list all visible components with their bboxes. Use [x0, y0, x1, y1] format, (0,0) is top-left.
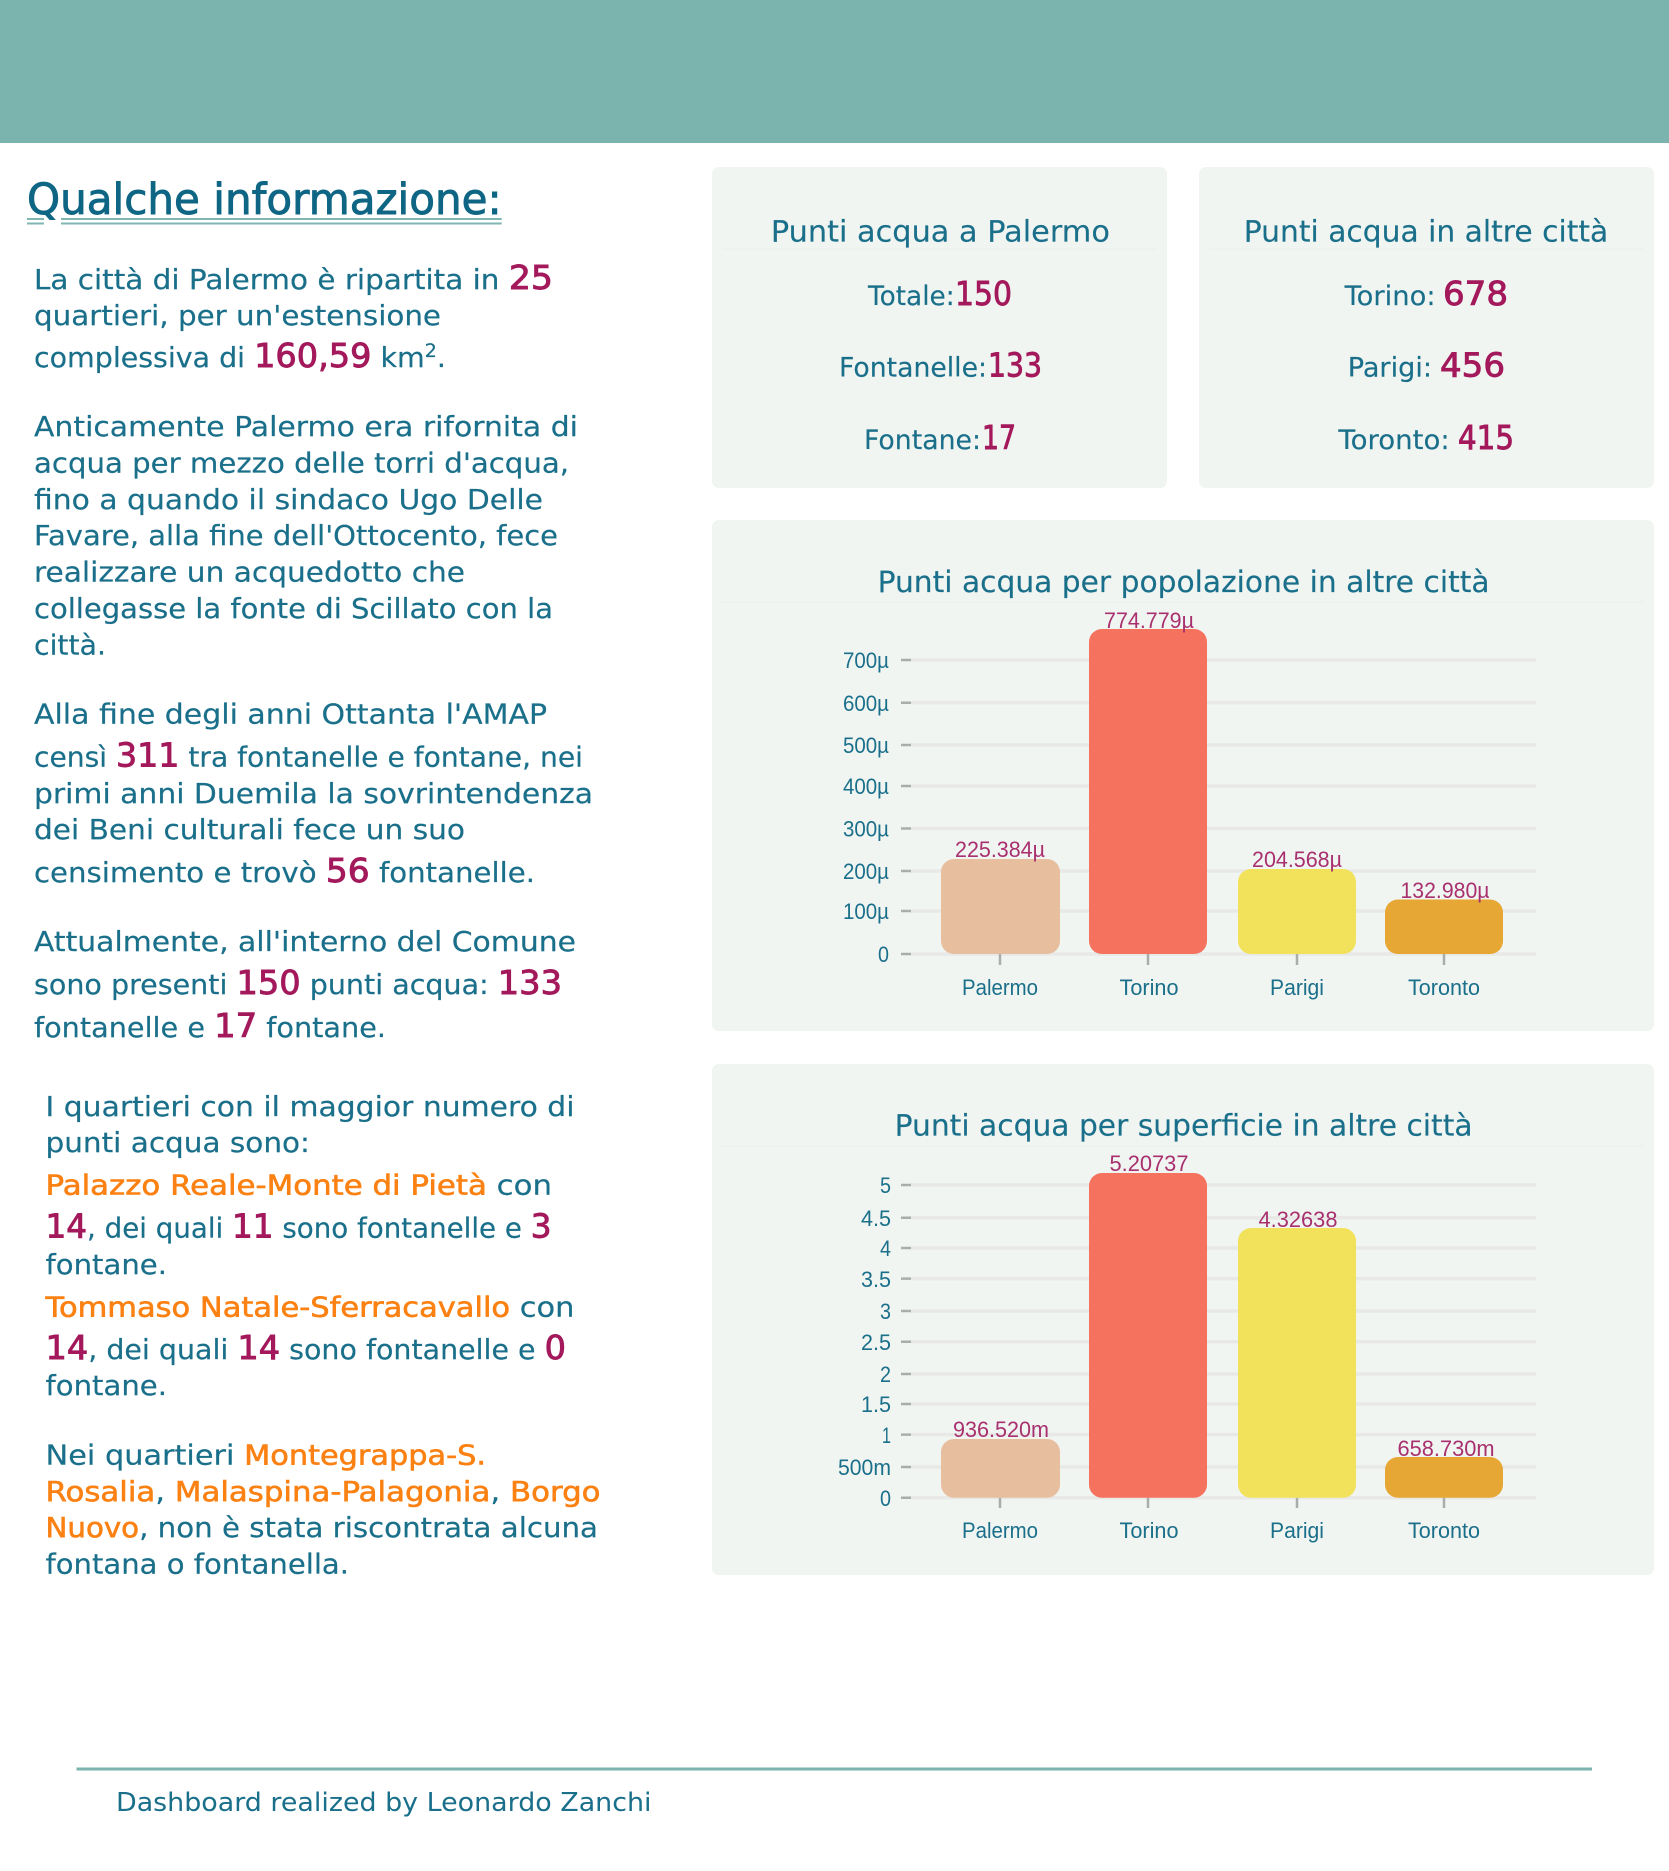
panel: Punti acqua in altre città: Torino: — [1344, 281, 1436, 312]
text block: quartieri con più punti acqua: 14, dei quali 11 sono fontanelle e 3 — [46, 1207, 552, 1246]
bar chart: superficie — [838, 1151, 1536, 1543]
bar chart: popolazione: 774.779µ — [1104, 608, 1194, 633]
bar chart: superficie: 658.730m — [1398, 1436, 1494, 1461]
text block: situazione attuale: Attualmente, all'interno del Comune — [34, 925, 576, 958]
bar chart: popolazione: 225.384µ — [955, 837, 1045, 862]
bar chart: superficie: 2 — [880, 1362, 891, 1387]
bar chart: popolazione: 600µ — [843, 691, 889, 716]
panel: Punti acqua a Palermo: Punti acqua a Palermo — [771, 215, 1110, 249]
bar chart: superficie: 5 — [880, 1173, 891, 1198]
text block: quartieri con più punti acqua: Palazzo Reale-Monte di Pietà con — [46, 1169, 552, 1202]
bar chart: popolazione: 204.568µ — [1252, 847, 1342, 872]
bar chart: superficie: 936.520m — [953, 1417, 1049, 1442]
text block: storia: acqua per mezzo delle torri d'acqua, — [34, 446, 569, 479]
chart title: popolazione: Punti acqua per popolazione in altre città — [878, 565, 1490, 599]
bar chart: superficie: 2.5 — [861, 1330, 891, 1355]
bar chart: popolazione: 300µ — [843, 816, 889, 842]
text block: ripartizione: . — [437, 341, 446, 374]
text block: quartieri senza punti acqua: Rosalia , Malaspina-Palagonia , Borgo — [46, 1475, 600, 1508]
text block: censimenti — [34, 698, 593, 890]
bar chart: popolazione: 500µ — [843, 733, 889, 758]
text block: quartieri con più punti acqua: I quartieri con il maggior numero di — [46, 1090, 574, 1123]
text block: quartieri senza punti acqua: Nei quartieri Montegrappa-S. — [46, 1439, 486, 1472]
footer credit: Dashboard realized by Leonardo Zanchi — [116, 1788, 652, 1818]
text block: censimenti: censimento e trovò 56 fontanelle. — [34, 851, 535, 890]
bar chart: superficie: 1 — [882, 1423, 891, 1448]
text block: quartieri con più punti acqua: fontane. — [46, 1369, 167, 1402]
bar chart: popolazione: 200µ — [843, 859, 889, 884]
bar chart: superficie: 5.20737 — [1110, 1151, 1188, 1176]
bar chart: superficie: Torino — [1120, 1518, 1178, 1543]
panel: Punti acqua in altre città: 415 — [1458, 418, 1514, 457]
panel: Punti acqua in altre città: Punti acqua in altre città — [1244, 215, 1608, 249]
bar chart: popolazione: Parigi — [1270, 975, 1324, 1000]
text block: storia: Anticamente Palermo era rifornita di — [34, 410, 578, 443]
text block: quartieri con più punti acqua: Tommaso Natale-Sferracavallo con — [44, 1291, 574, 1324]
text block: situazione attuale — [34, 925, 576, 1045]
text block: storia: collegasse la fonte di Scillato con la — [34, 592, 553, 625]
text block: censimenti: Alla fine degli anni Ottanta l'AMAP — [34, 698, 547, 730]
bar chart: popolazione — [843, 608, 1536, 1000]
panel: Punti acqua a Palermo: 150 — [955, 274, 1012, 313]
panel: Punti acqua in altre città: 678 — [1443, 274, 1508, 313]
text block: quartieri con più punti acqua: punti acqua sono: — [46, 1126, 310, 1159]
panel: Punti acqua a Palermo: Fontane: — [864, 425, 981, 456]
text block: quartieri con più punti acqua: fontane. — [46, 1248, 167, 1281]
text block: quartieri con più punti acqua: 14, dei quali 14 sono fontanelle e 0 — [46, 1328, 566, 1367]
bar chart: popolazione: 0 — [878, 942, 889, 967]
bar chart: popolazione: Toronto — [1408, 975, 1480, 1000]
bar chart: superficie: 4.32638 — [1258, 1207, 1338, 1232]
text block: quartieri con più punti acqua — [44, 1090, 574, 1402]
panel: Punti acqua a Palermo: Fontanelle: — [839, 353, 987, 384]
bar chart: superficie: 500m — [838, 1455, 891, 1480]
text block: ripartizione: quartieri, per un'estensione — [34, 299, 441, 332]
text block: storia — [34, 410, 578, 661]
text block: situazione attuale: sono presenti 150 punti acqua: 133 — [34, 963, 562, 1002]
panel: Punti acqua a Palermo: Totale: — [867, 281, 955, 312]
text block: storia: realizzare un acquedotto che — [34, 556, 465, 589]
panel: Punti acqua a Palermo: 133 — [988, 346, 1042, 385]
panel: Punti acqua in altre città: 456 — [1440, 346, 1505, 385]
footer rule — [76, 1768, 1592, 1770]
text block: ripartizione: 2 — [425, 340, 437, 362]
text block: quartieri senza punti acqua: fontana o fontanella. — [46, 1548, 349, 1580]
bar chart: popolazione: 400µ — [843, 774, 889, 799]
bar chart: superficie: 1.5 — [861, 1392, 891, 1417]
bar chart: superficie: Toronto — [1408, 1518, 1480, 1543]
heading: Qualche informazione: Qualche informazione: — [27, 175, 502, 225]
header band — [0, 0, 1669, 143]
panel: Punti acqua a Palermo — [712, 167, 1167, 488]
panel: Punti acqua per popolazione — [712, 520, 1654, 1031]
text block: quartieri senza punti acqua: Nuovo, non è stata riscontrata alcuna — [46, 1511, 598, 1544]
bar chart: superficie: 3 — [880, 1299, 891, 1324]
bar chart: superficie: Parigi — [1270, 1518, 1324, 1543]
text block: censimenti: censì 311 tra fontanelle e fontane, nei — [34, 736, 583, 774]
text block: ripartizione: La città di Palermo è ripartita in 25 — [34, 258, 553, 297]
bar chart: popolazione: 100µ — [843, 899, 889, 924]
text block: situazione attuale: fontanelle e 17 fontane. — [34, 1006, 386, 1045]
text block: ripartizione: complessiva di 160,59 km — [34, 336, 424, 375]
panel: Punti acqua in altre città: Parigi: — [1348, 353, 1432, 384]
bar chart: superficie: 3.5 — [861, 1267, 891, 1292]
bar chart: superficie: 4 — [880, 1236, 891, 1261]
bar chart: superficie: 4.5 — [861, 1206, 891, 1231]
bar chart: popolazione: 132.980µ — [1400, 878, 1490, 903]
chart title: superficie: Punti acqua per superficie in altre città — [895, 1108, 1473, 1142]
text block: censimenti: dei Beni culturali fece un suo — [34, 813, 465, 846]
text block: storia: città. — [34, 628, 106, 661]
text block: storia: fino a quando il sindaco Ugo Delle — [34, 483, 543, 516]
bar chart: superficie: Palermo — [962, 1518, 1038, 1543]
panel: Punti acqua in altre città: Toronto: — [1337, 425, 1450, 456]
bar chart: popolazione: Palermo — [962, 975, 1038, 1000]
bar chart: popolazione: 700µ — [843, 648, 889, 673]
text block: quartieri senza punti acqua — [46, 1439, 600, 1580]
panel: Punti acqua a Palermo: 17 — [982, 418, 1016, 457]
text block: storia: Favare, alla fine dell'Ottocento, fece — [34, 519, 558, 552]
text block: ripartizione — [34, 258, 553, 375]
bar chart: popolazione: Torino — [1120, 975, 1178, 1000]
text block: censimenti: primi anni Duemila la sovrintendenza — [34, 777, 593, 810]
panel: Punti acqua per superficie — [712, 1064, 1654, 1575]
panel: Punti acqua in altre città — [1199, 167, 1654, 488]
bar chart: superficie: 0 — [880, 1486, 891, 1511]
